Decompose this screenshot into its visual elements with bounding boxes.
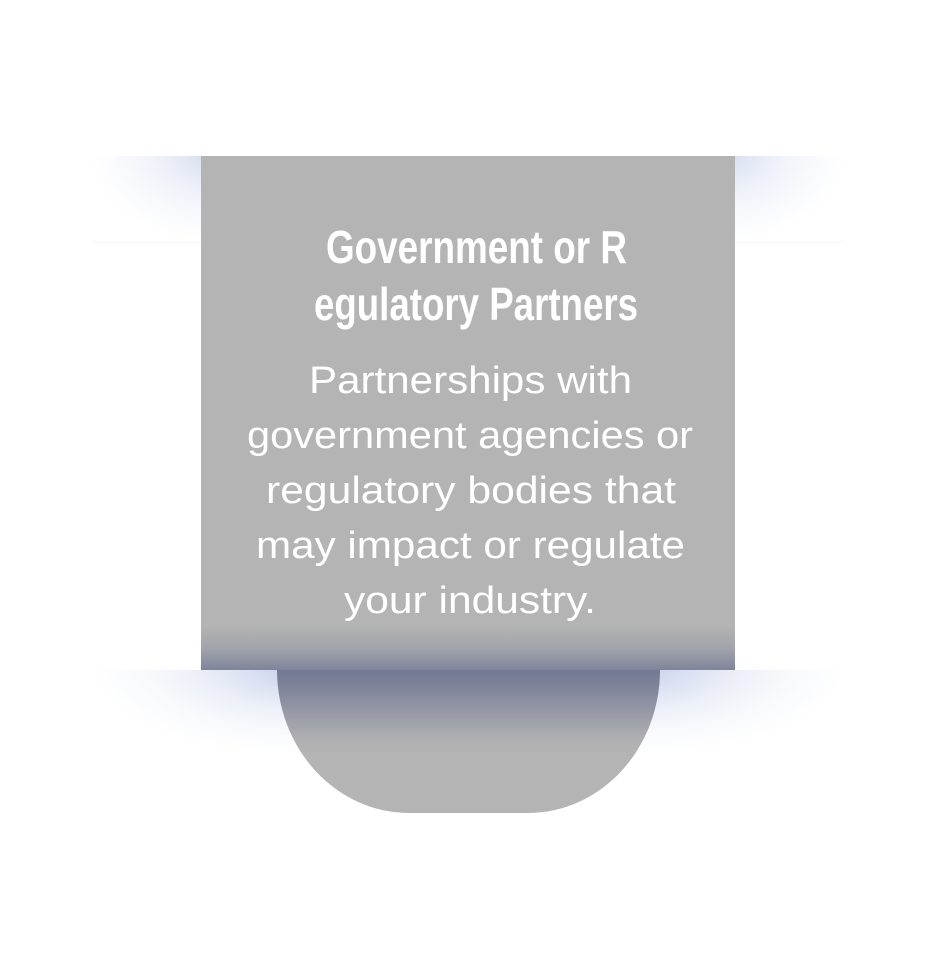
body text: Partnerships with [309, 360, 632, 402]
body text: regulatory bodies that [266, 470, 676, 512]
body text [247, 360, 693, 622]
shadow: bottom left of tab [93, 670, 333, 755]
rounded bottom tab [277, 670, 660, 813]
shadow: top right of panel [735, 156, 843, 242]
body text: your industry. [344, 580, 596, 622]
heading: Government or R [326, 221, 627, 273]
heading [314, 221, 638, 330]
shadow: bottom right of tab [604, 670, 844, 755]
body text: government agencies or [247, 415, 693, 457]
heading: egulatory Partners [314, 278, 638, 330]
shadow: top left of panel [93, 156, 201, 242]
body text: may impact or regulate [256, 525, 685, 567]
main grey panel [201, 156, 735, 670]
